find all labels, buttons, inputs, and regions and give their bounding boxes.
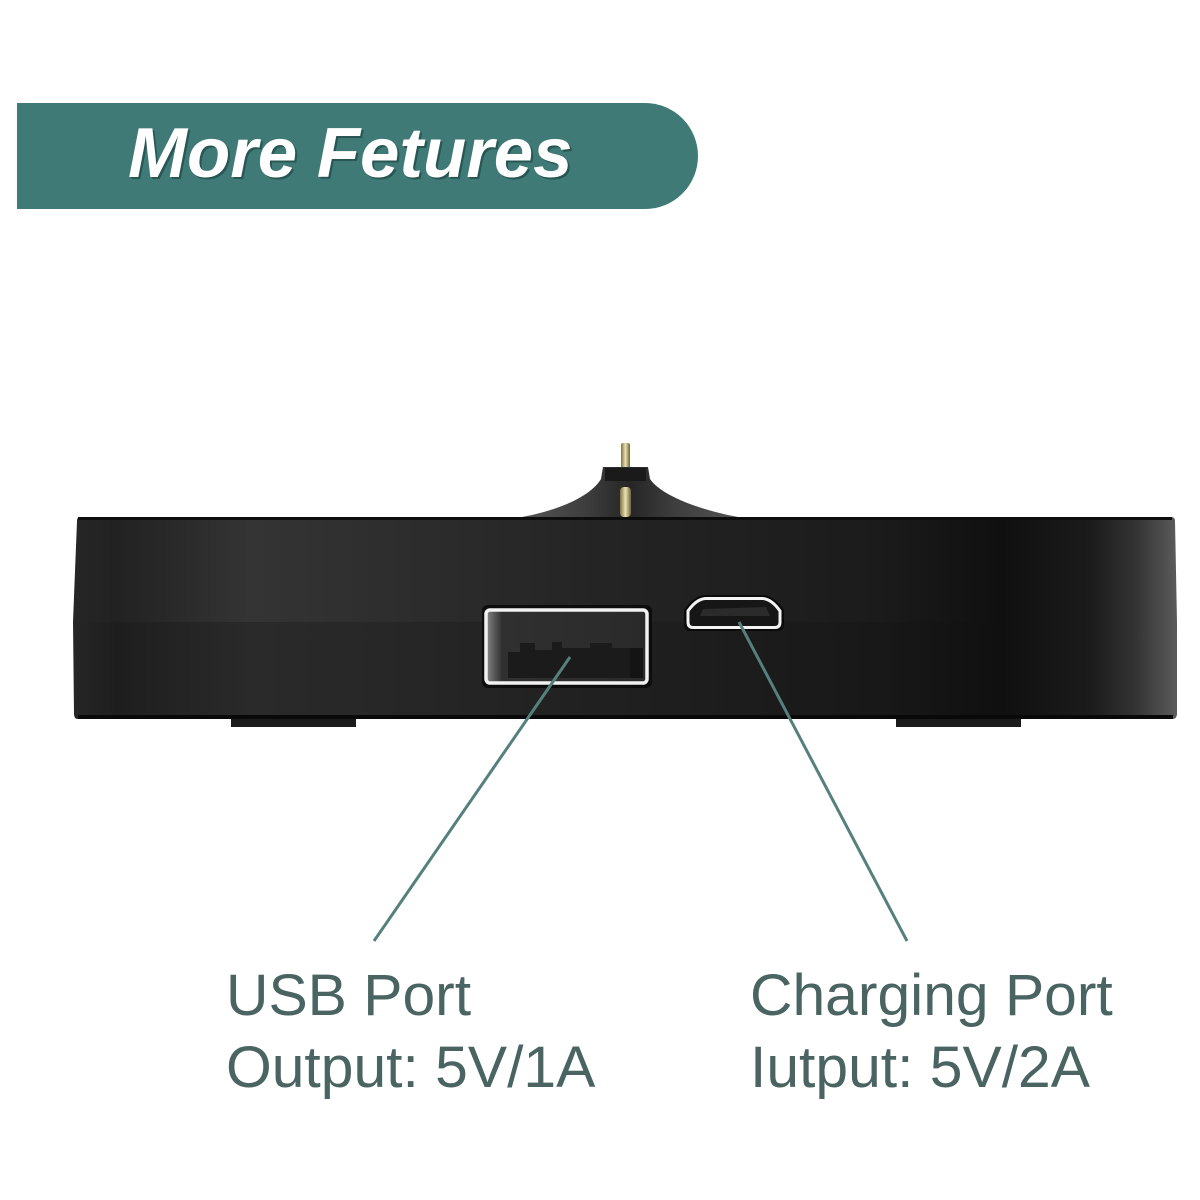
label: charging port: Charging Port	[750, 963, 1113, 1028]
charging pin and neck	[522, 443, 738, 517]
label: USB port: Output: 5V/1A	[226, 1035, 596, 1100]
charging port	[684, 595, 784, 631]
device: charging dock side view	[73, 443, 1177, 727]
title text: More Fetures	[128, 114, 573, 193]
label: USB port: USB Port	[226, 963, 471, 1028]
leader line: USB port	[374, 657, 570, 941]
title text: More Fetures	[130, 116, 575, 195]
USB port	[482, 605, 652, 688]
device body	[73, 517, 1177, 719]
leader line: charging port	[739, 622, 907, 941]
label: charging port: Iutput: 5V/2A	[750, 1035, 1091, 1100]
title banner	[17, 103, 698, 209]
device feet	[231, 715, 1021, 727]
